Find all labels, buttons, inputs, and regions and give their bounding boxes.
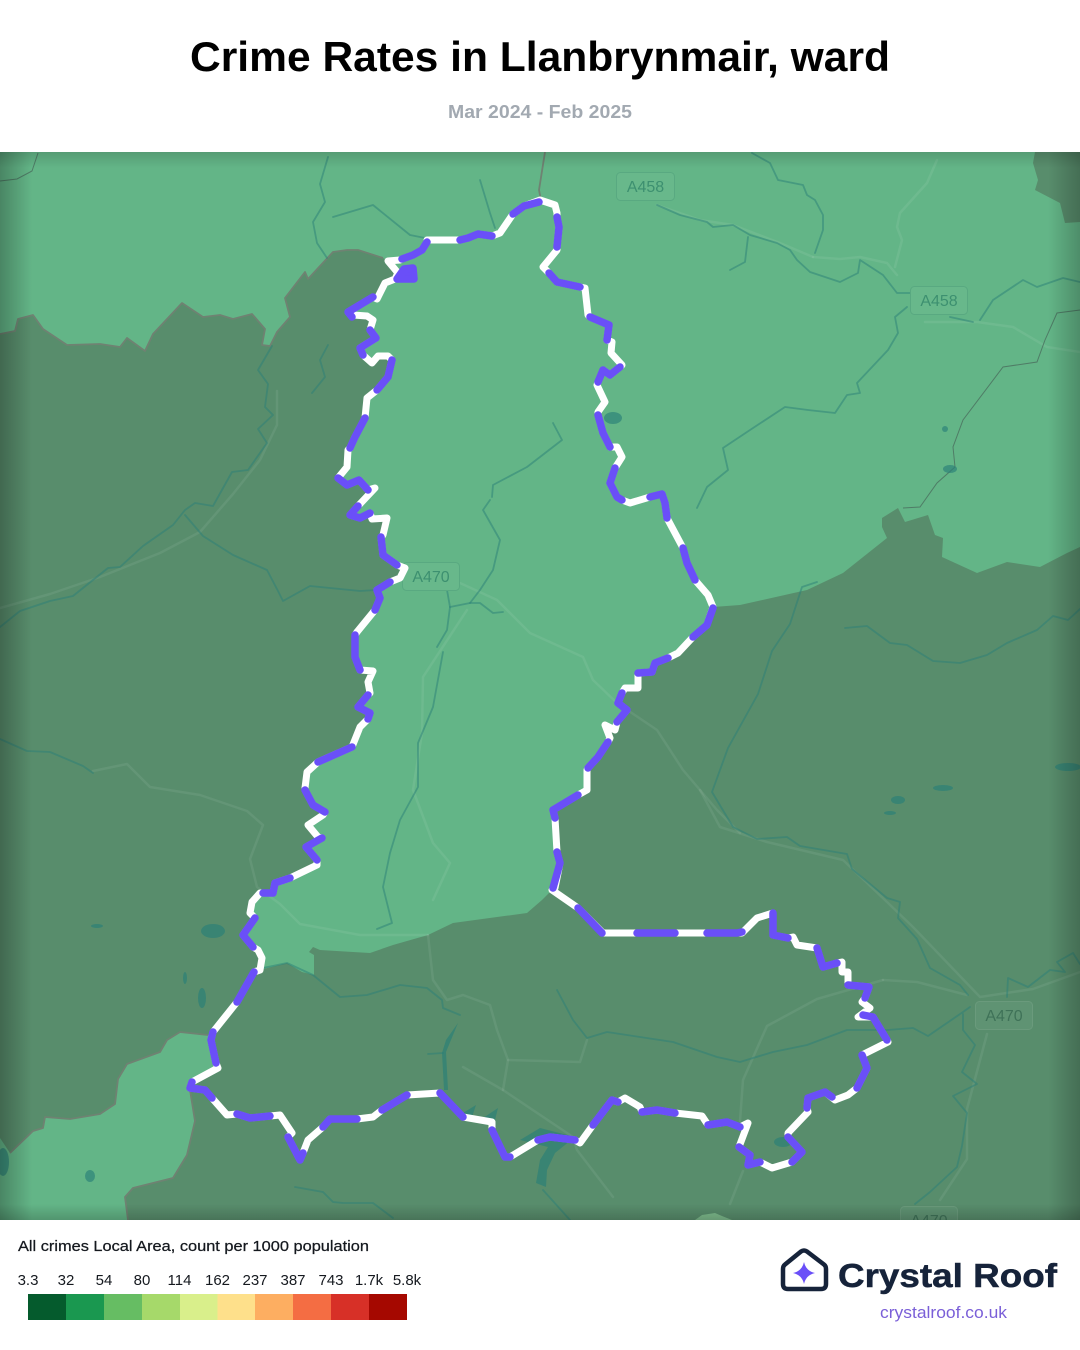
rivers	[0, 153, 1080, 1220]
legend	[18, 1238, 422, 1320]
road label: A458 east	[910, 286, 968, 314]
legend scale labels: 114	[168, 1272, 191, 1289]
roads	[0, 160, 1080, 1204]
legend scale labels: 80	[134, 1272, 150, 1289]
road label: A470 bottom, cropped	[900, 1206, 958, 1220]
choropleth: small southern patch	[695, 1213, 732, 1220]
legend scale labels: 32	[58, 1272, 74, 1289]
road label: A470 south-east: A470	[985, 1008, 1023, 1025]
subtitle: date range: Mar 2024 - Feb 2025	[448, 102, 632, 122]
choropleth: south-west lighter area	[0, 1032, 218, 1220]
lakes and reservoirs	[0, 412, 1080, 1187]
legend scale labels	[18, 1272, 422, 1289]
wordmark: Crystal Roof	[838, 1257, 1058, 1294]
road label: A458 north	[616, 172, 674, 200]
road label: A470 central	[402, 562, 460, 590]
legend scale labels: 387	[280, 1272, 306, 1289]
legend scale labels: 5.8k	[393, 1272, 422, 1289]
road label: A470 bottom, cropped: A470	[910, 1213, 948, 1230]
county boundary lines	[0, 152, 545, 1220]
legend scale labels: 162	[205, 1272, 230, 1289]
legend scale labels: 1.7k	[355, 1272, 384, 1289]
legend scale labels: 54	[96, 1272, 112, 1289]
choropleth: lighter area including the ward	[0, 152, 1080, 975]
road label: A458 east: A458	[920, 293, 958, 310]
ward boundary: Llanbrynmair	[190, 200, 888, 1168]
choropleth: north-east darker corner	[1033, 152, 1080, 223]
legend title: All crimes Local Area, count per 1000 population	[18, 1238, 369, 1255]
legend scale labels: 743	[318, 1272, 344, 1289]
map edge vignette	[0, 152, 1080, 1220]
logo: Crystal Roof	[783, 1250, 1058, 1322]
icon: house with star	[783, 1250, 826, 1289]
title: Crime Rates in Llanbrynmair, ward	[190, 33, 890, 80]
thin boundary lines	[0, 153, 1080, 508]
legend colour ramp	[28, 1294, 407, 1320]
boundary base: white line	[190, 200, 888, 1168]
road label: A470 south-east	[976, 1002, 1032, 1030]
boundary dashes: purple segments	[190, 202, 887, 1165]
legend scale labels: 237	[242, 1272, 268, 1289]
website link: crystalroof.co.uk	[880, 1304, 1008, 1322]
map base: darker crime-rate area	[0, 152, 1080, 1220]
legend scale labels: 3.3	[18, 1272, 38, 1289]
road label: A458 north: A458	[627, 179, 664, 196]
road label: A470 central: A470	[412, 569, 450, 586]
